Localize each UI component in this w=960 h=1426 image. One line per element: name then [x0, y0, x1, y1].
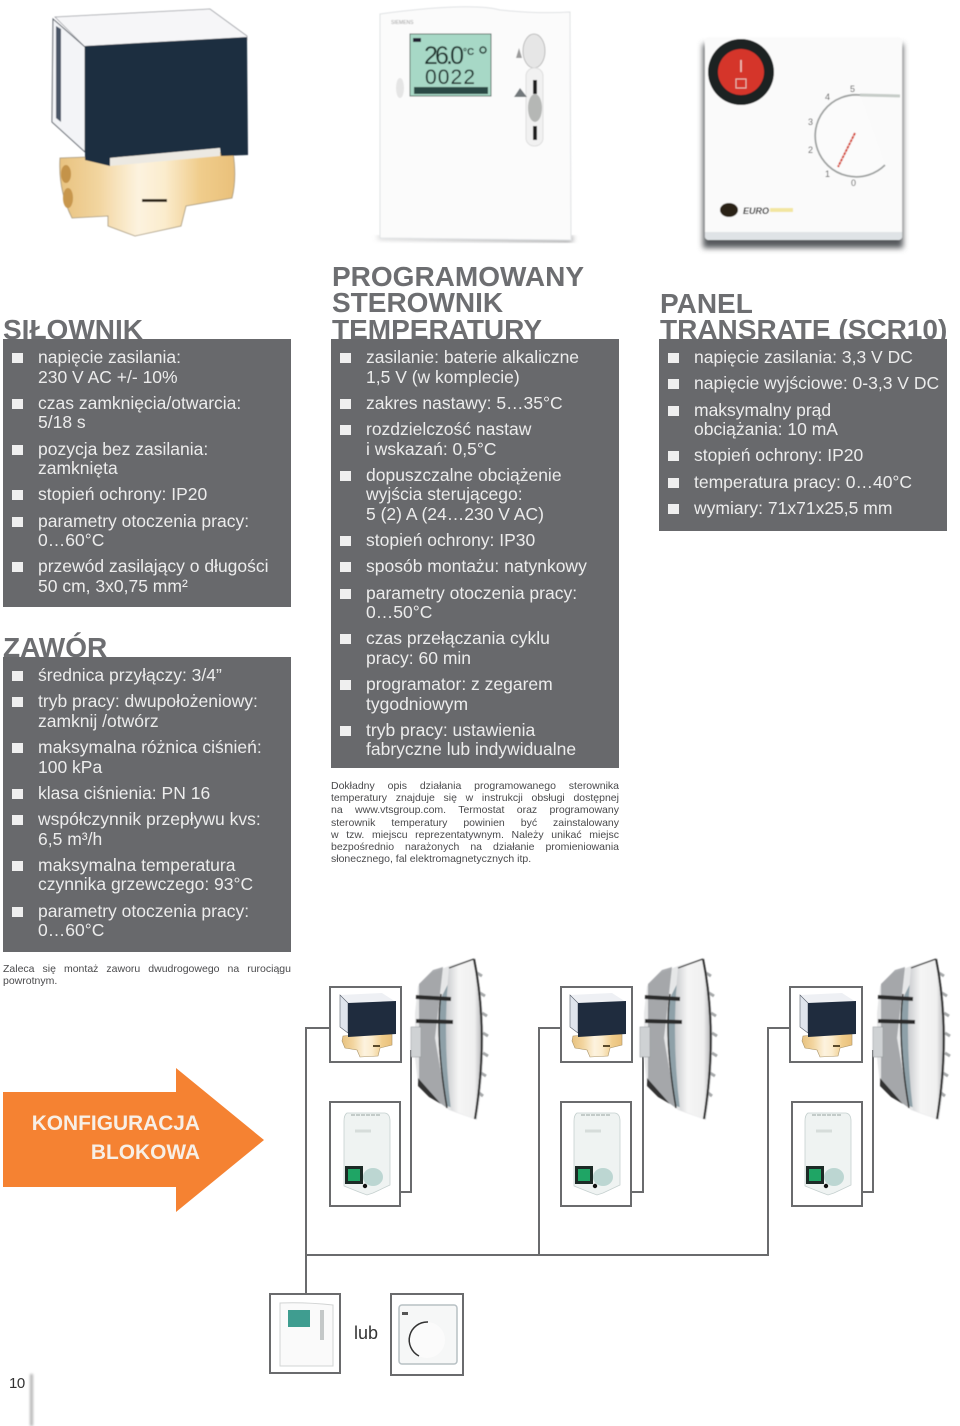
panel: transrate specs: stopień ochrony: IP20 [694, 445, 863, 465]
panel: zawór specs: 6,5 m³/h [38, 828, 102, 848]
page number: 10 [9, 1375, 25, 1392]
panel: siłownik specs: czas zamknięcia/otwarcia: [38, 393, 241, 413]
unit 1: valve box [330, 987, 401, 1062]
panel: sterownik specs: fabryczne lub indywidualne [366, 739, 576, 759]
panel: zawór specs: średnica przyłączy: 3/4” [38, 665, 222, 685]
panel: siłownik specs: parametry otoczenia pracy: [38, 510, 249, 530]
panel: sterownik specs: 0…50°C [366, 602, 432, 622]
panel: sterownik specs: sposób montażu: natynkowy [366, 556, 587, 576]
photo: programmable thermostat [378, 7, 573, 242]
panel: sterownik specs: 1,5 V (w komplecie) [366, 366, 520, 386]
heading: panel transrate: PANEL [660, 288, 753, 319]
panel: transrate specs: obciążania: 10 mA [694, 419, 838, 439]
note: thermostat placement: sterownik temperatury powinien być zainstalowany [331, 817, 619, 829]
panel: siłownik specs: przewód zasilający o długości [38, 556, 269, 576]
panel: sterownik specs: czas przełączania cyklu [366, 628, 550, 648]
panel: sterownik specs: zasilanie: baterie alkaliczne [366, 347, 579, 367]
panel: transrate specs [659, 339, 947, 531]
page edge shadow [30, 1374, 33, 1426]
panel: siłownik specs: 5/18 s [38, 412, 86, 432]
note: valve mounting [3, 963, 291, 987]
unit 2: controller box [561, 1102, 631, 1206]
panel: sterownik specs: i wskazań: 0,5°C [366, 438, 497, 458]
panel: siłownik specs: 0…60°C [38, 530, 104, 550]
panel: siłownik specs: 230 V AC +/- 10% [38, 366, 178, 386]
photo: Transrate panel: 2 [808, 145, 813, 155]
panel: zawór specs: klasa ciśnienia: PN 16 [38, 783, 210, 803]
panel: sterownik specs: dopuszczalne obciążenie [366, 465, 562, 485]
panel: zawór specs: tryb pracy: dwupołożeniowy: [38, 691, 258, 711]
panel: sterownik specs: zakres nastawy: 5…35°C [366, 393, 563, 413]
unit 3: fan heater [873, 958, 950, 1120]
panel: sterownik specs: pracy: 60 min [366, 648, 471, 668]
heading: programowany sterownik temperatury [332, 261, 584, 345]
unit 2: fan heater [640, 958, 717, 1120]
note: thermostat placement: na www.vtsgroup.com. Termostat oraz programowany [331, 804, 619, 816]
panel: transrate specs: wymiary: 71x71x25,5 mm [694, 498, 892, 518]
panel: zawór specs: czynnika grzewczego: 93°C [38, 874, 253, 894]
panel: siłownik specs: pozycja bez zasilania: [38, 438, 208, 458]
panel: transrate specs: maksymalny prąd [694, 400, 831, 420]
heading: siłownik: SIŁOWNIK [3, 314, 143, 345]
panel: sterownik specs: tygodniowym [366, 694, 468, 714]
arrow label [32, 1112, 200, 1164]
panel: zawór specs: współczynnik przepływu kvs: [38, 809, 261, 829]
panel: transrate specs: napięcie wyjściowe: 0-3,3 V DC [694, 373, 939, 393]
panel: zawór specs: 0…60°C [38, 920, 104, 940]
note: valve mounting: Zaleca się montaż zaworu dwudrogowego na rurociągu [3, 963, 291, 975]
heading: programowany sterownik temperatury: PROGRAMOWANY [332, 261, 584, 292]
wiring diagram lines [306, 1028, 873, 1294]
photo: Transrate panel [703, 37, 903, 248]
panel: zawór specs: zamknij /otwórz [38, 711, 159, 731]
note: thermostat placement: słonecznego, fal elektromagnetycznych itp. [331, 853, 531, 865]
photo: Transrate panel: EURO [743, 206, 769, 216]
note: thermostat placement: Dokładny opis działania programowanego sterownika [331, 780, 619, 792]
unit 1: fan heater [411, 958, 488, 1120]
panel: sterownik specs: programator: z zegarem [366, 674, 553, 694]
panel: zawór specs [3, 657, 291, 952]
arrow label: KONFIGURACJA [32, 1112, 200, 1135]
photo: Transrate panel: 1 [825, 169, 830, 179]
heading: programowany sterownik temperatury: STEROWNIK [332, 287, 503, 318]
photo: Transrate panel: 0 [851, 178, 856, 188]
panel: sterownik specs: 5 (2) A (24…230 V AC) [366, 504, 544, 524]
note: thermostat placement: temperatury znajduje się w instrukcji obsługi dostępnej [331, 792, 619, 804]
arrow label: BLOKOWA [91, 1141, 200, 1164]
unit 1: controller box [330, 1102, 400, 1206]
panel: zawór specs: parametry otoczenia pracy: [38, 900, 249, 920]
photo: programmable thermostat: °C [463, 47, 474, 58]
label: lub: lub [354, 1323, 378, 1343]
photo: Transrate panel: 4 [825, 92, 830, 102]
note: valve mounting: powrotnym. [3, 975, 57, 987]
panel: siłownik specs: 50 cm, 3x0,75 mm² [38, 576, 188, 596]
photo: programmable thermostat: 0022 [425, 66, 475, 89]
note: thermostat placement: bezpośrednio narażonych na działanie promieniowania [331, 841, 619, 853]
unit 3: controller box [792, 1102, 862, 1206]
thumbnail: room thermostat panel [391, 1294, 463, 1375]
panel: transrate specs: napięcie zasilania: 3,3 V DC [694, 347, 913, 367]
thumbnail: programmable thermostat [270, 1294, 340, 1373]
panel: siłownik specs: napięcie zasilania: [38, 347, 181, 367]
photo: programmable thermostat: 26.0 [424, 42, 464, 70]
panel: sterownik specs: rozdzielczość nastaw [366, 419, 531, 439]
panel: transrate specs: temperatura pracy: 0…40°C [694, 472, 912, 492]
note: thermostat placement [331, 780, 619, 865]
panel: siłownik specs [3, 339, 291, 607]
photo: programmable thermostat: SIEMENS [391, 20, 414, 26]
note: thermostat placement: w tzw. miejscu reprezentatywnym. Należy unikać miejsc [331, 829, 619, 841]
panel: zawór specs: maksymalna temperatura [38, 855, 235, 875]
panel: sterownik specs: stopień ochrony: IP30 [366, 530, 535, 550]
panel: sterownik specs: parametry otoczenia pracy: [366, 582, 577, 602]
photo: Transrate panel: 3 [808, 117, 813, 127]
photo: actuator with valve [52, 9, 248, 236]
heading: zawór: ZAWÓR [3, 632, 107, 663]
heading: panel transrate [660, 288, 947, 345]
heading: programowany sterownik temperatury: TEMPERATURY [332, 314, 542, 345]
unit 3: valve box [790, 987, 862, 1062]
panel: sterownik specs [331, 339, 619, 768]
heading: panel transrate: TRANSRATE (SCR10) [660, 314, 947, 345]
arrow: konfiguracja blokowa [3, 1068, 264, 1212]
panel: sterownik specs: tryb pracy: ustawienia [366, 720, 535, 740]
unit 2: valve box [561, 987, 632, 1062]
photo: Transrate panel: 5 [850, 84, 855, 94]
panel: siłownik specs: zamknięta [38, 458, 118, 478]
panel: sterownik specs: wyjścia sterującego: [366, 484, 523, 504]
panel: zawór specs: maksymalna różnica ciśnień: [38, 737, 262, 757]
panel: siłownik specs: stopień ochrony: IP20 [38, 484, 207, 504]
panel: zawór specs: 100 kPa [38, 756, 102, 776]
